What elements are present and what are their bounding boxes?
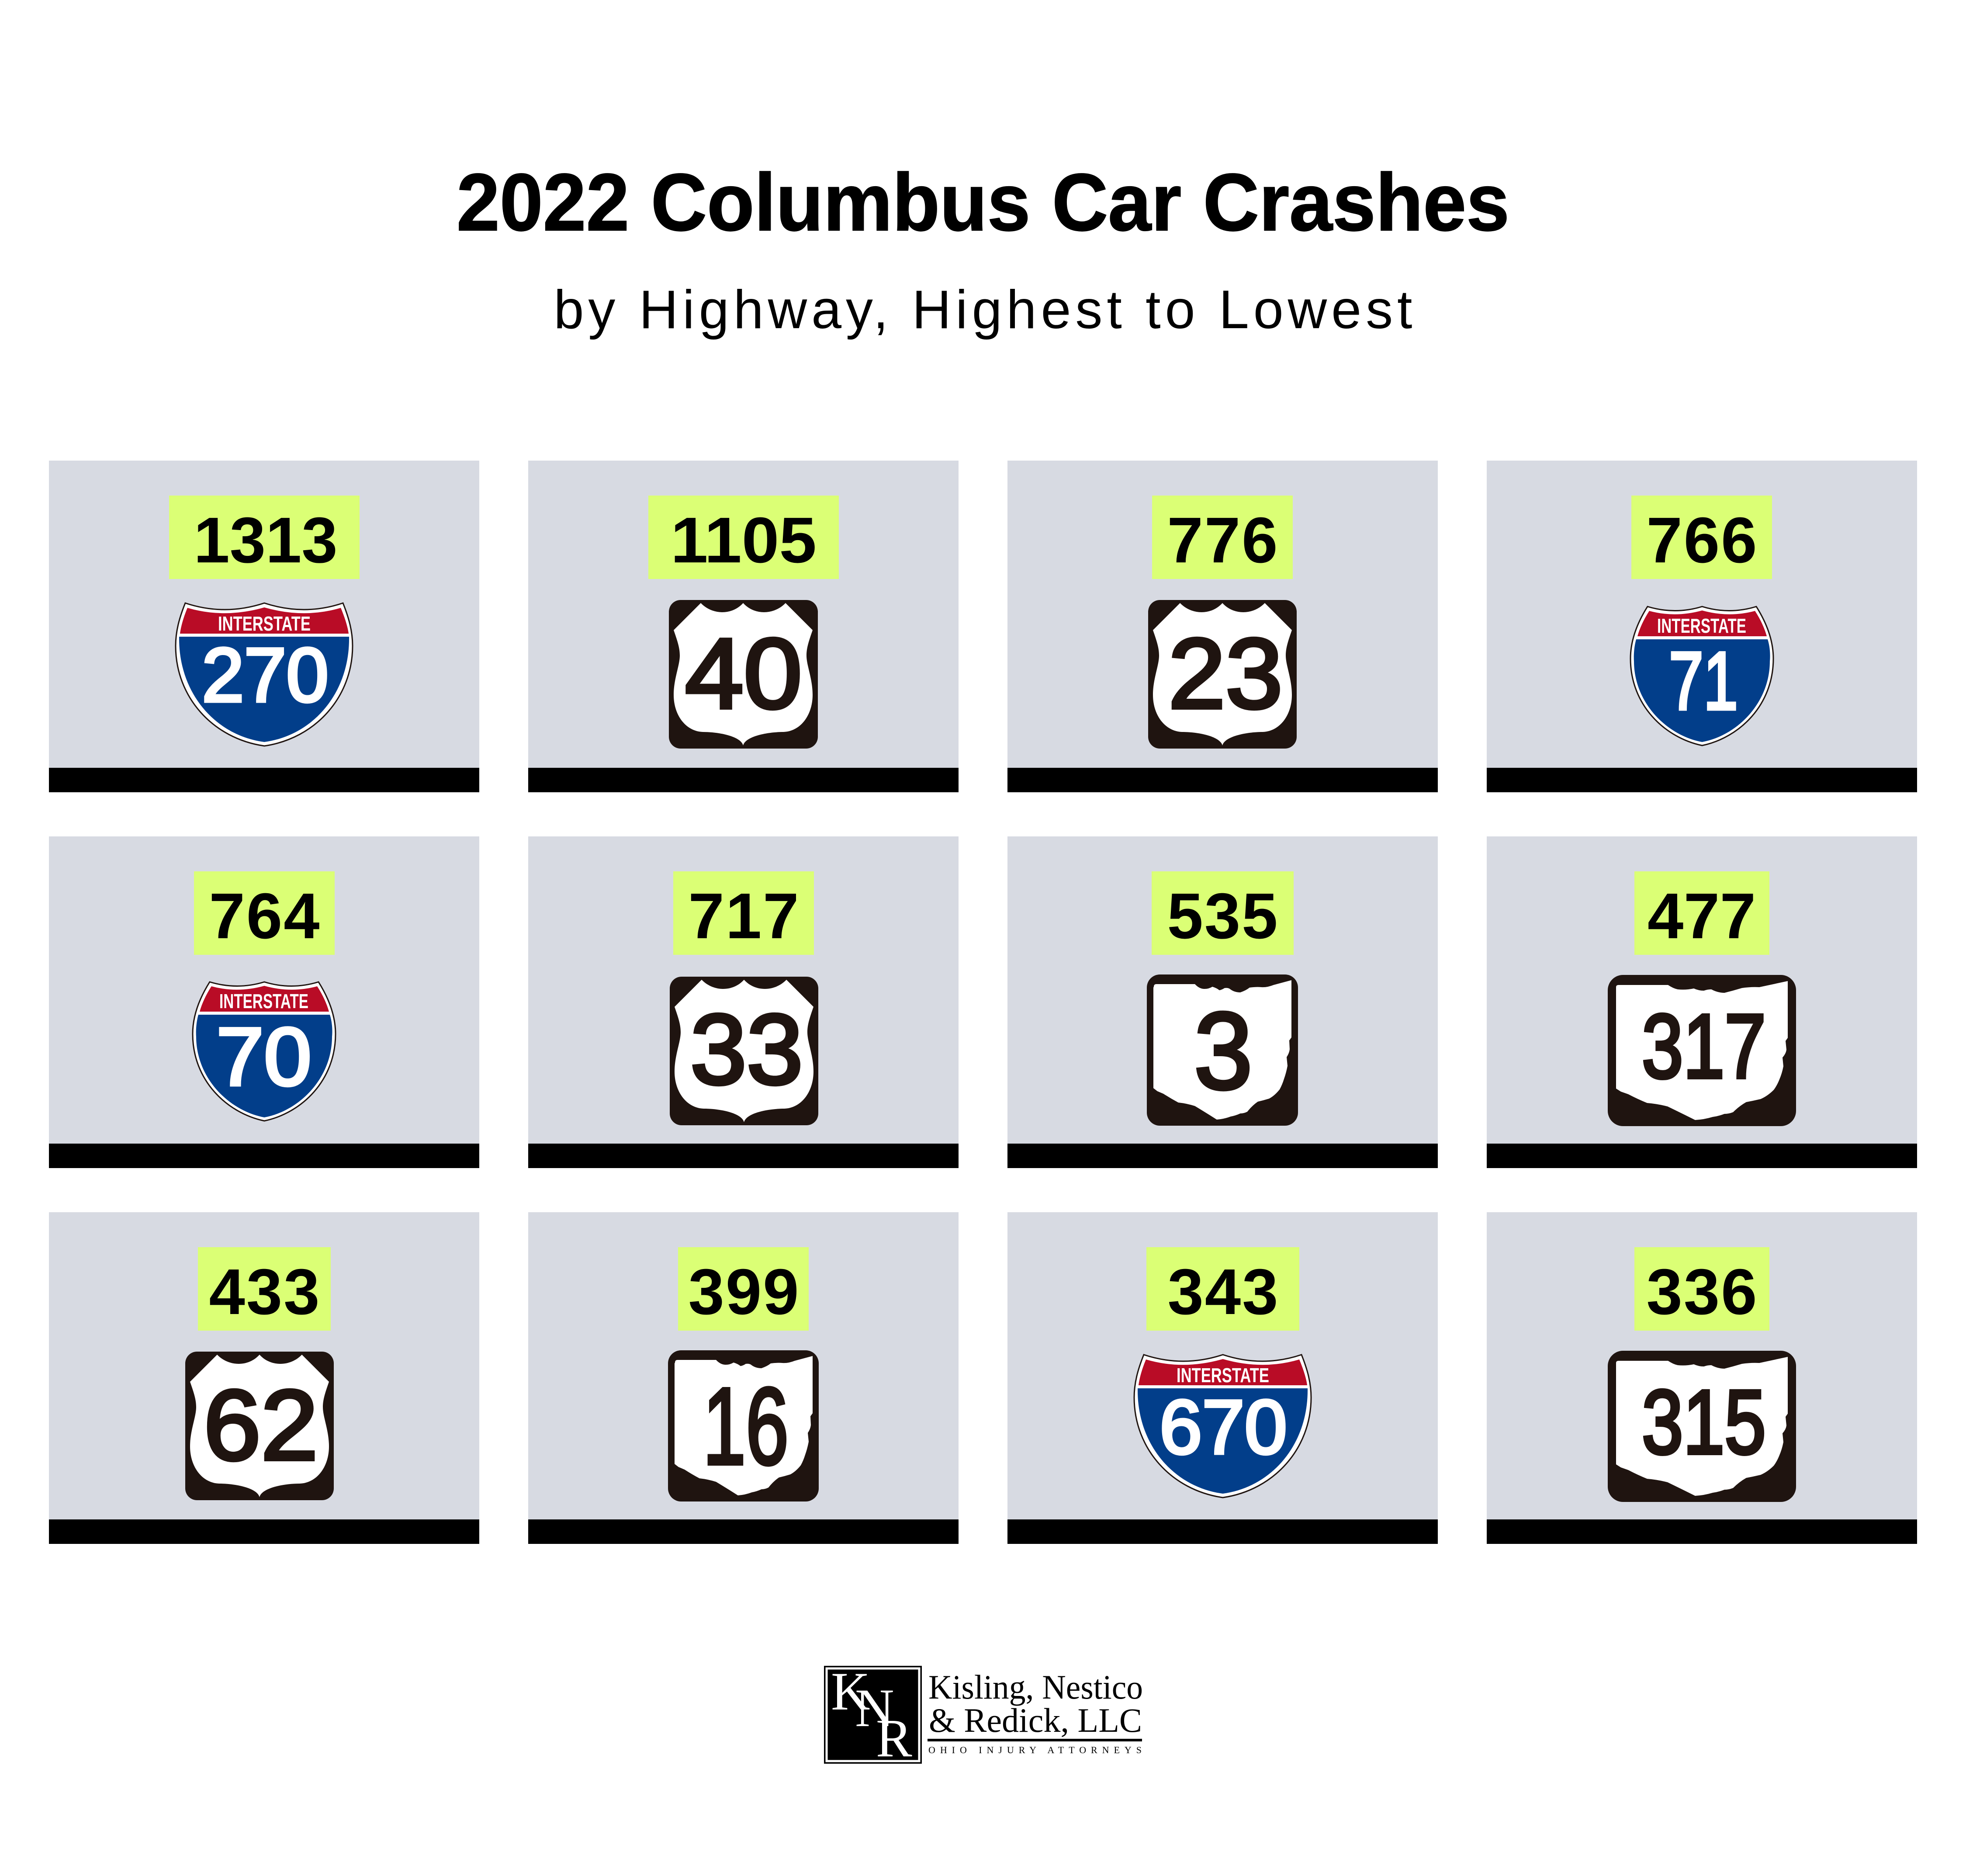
icon: US 33 shield <box>670 977 818 1125</box>
icon: US 62 shield <box>185 1352 334 1500</box>
count box: 477 <box>1634 871 1769 955</box>
icon: Interstate 70 shield: 70 <box>216 1011 312 1103</box>
icon: US 33 shield: 33 <box>690 994 803 1105</box>
panel: US 62 <box>49 1212 479 1544</box>
panel: US 23 <box>1007 461 1438 792</box>
logo mark: KNR monogram <box>824 1661 922 1768</box>
icon: Ohio 315 sign: 315 <box>1642 1372 1766 1473</box>
icon: Interstate 670 shield: 670 <box>1160 1385 1287 1470</box>
panel: Interstate 270 <box>49 461 479 792</box>
logo text: firm name <box>928 1668 1143 1755</box>
panel: US 33 <box>528 836 959 1168</box>
icon: US 62 shield: 62 <box>204 1370 318 1481</box>
count box: 766 <box>1631 496 1772 579</box>
icon: Interstate 70 shield <box>193 982 336 1121</box>
icon: US 23 shield: 23 <box>1168 618 1283 729</box>
panel: Ohio 315 <box>1487 1212 1917 1544</box>
panel: Ohio 16 <box>528 1212 959 1544</box>
count box: 336: 336 <box>1646 1256 1757 1328</box>
panel: Interstate 70 <box>49 836 479 1168</box>
count box: 766: 766 <box>1646 504 1757 576</box>
logo: Kisling, Nestico & Redick, LLC <box>824 1661 1143 1768</box>
count box: 776 <box>1152 496 1293 579</box>
icon: Ohio 317 sign <box>1608 975 1796 1126</box>
icon: Interstate 71 shield: 71 <box>1669 635 1738 727</box>
count box: 535 <box>1152 871 1294 955</box>
panel: Ohio 3 <box>1007 836 1438 1168</box>
count box: 343: 343 <box>1167 1256 1278 1328</box>
panel: Ohio 317 <box>1487 836 1917 1168</box>
icon: Ohio 3 sign <box>1147 974 1298 1126</box>
icon: Interstate 670 shield: INTERSTATE <box>1177 1364 1269 1387</box>
icon: Interstate 71 shield <box>1630 607 1773 746</box>
count box: 535: 535 <box>1167 880 1277 952</box>
count box: 1313 <box>169 496 360 579</box>
count box: 1105: 1105 <box>671 504 817 576</box>
subtitle: by Highway, Highest to Lowest <box>554 280 1412 340</box>
icon: Interstate 270 shield: 270 <box>202 633 329 718</box>
icon: Ohio 3 sign: 3 <box>1194 990 1253 1112</box>
icon: US 40 shield: 40 <box>685 618 802 729</box>
icon: Interstate 270 shield: INTERSTATE <box>218 612 311 635</box>
count box: 717: 717 <box>689 880 799 952</box>
icon: Ohio 317 sign: 317 <box>1642 996 1766 1097</box>
count box: 477: 477 <box>1648 880 1756 952</box>
icon: Interstate 70 shield: INTERSTATE <box>219 990 308 1013</box>
panel: US 40 <box>528 461 959 792</box>
icon: US 23 shield <box>1148 600 1297 749</box>
logo mark: KNR monogram: R <box>876 1708 912 1768</box>
count box: 1313: 1313 <box>194 504 338 576</box>
icon: Ohio 16 sign <box>668 1350 819 1501</box>
count box: 433: 433 <box>209 1256 320 1328</box>
count box: 399: 399 <box>689 1256 799 1328</box>
count box: 776: 776 <box>1167 504 1277 576</box>
title: 2022 Columbus Car Crashes <box>457 157 1509 248</box>
icon: Ohio 16 sign: 16 <box>703 1365 789 1487</box>
count box: 717 <box>673 871 814 955</box>
logo text: firm name: OHIO INJURY ATTORNEYS <box>928 1744 1142 1755</box>
logo text: firm name: Kisling, Nestico <box>928 1668 1143 1706</box>
icon: Interstate 670 shield <box>1134 1355 1311 1498</box>
panel: Interstate 71 <box>1487 461 1917 792</box>
count box: 764 <box>194 871 335 955</box>
panel: Interstate 670 <box>1007 1212 1438 1544</box>
logo mark: KNR monogram: K <box>831 1661 870 1721</box>
count box: 764: 764 <box>209 880 320 952</box>
logo text: firm name: & Redick, LLC <box>929 1701 1142 1739</box>
icon: Interstate 71 shield: INTERSTATE <box>1657 614 1746 637</box>
icon: US 40 shield <box>669 600 818 749</box>
icon: Interstate 270 shield <box>176 603 353 746</box>
count box: 343 <box>1146 1247 1299 1331</box>
count box: 1105 <box>648 496 839 579</box>
logo mark: KNR monogram: N <box>855 1678 894 1738</box>
icon: Ohio 315 sign <box>1608 1351 1796 1502</box>
